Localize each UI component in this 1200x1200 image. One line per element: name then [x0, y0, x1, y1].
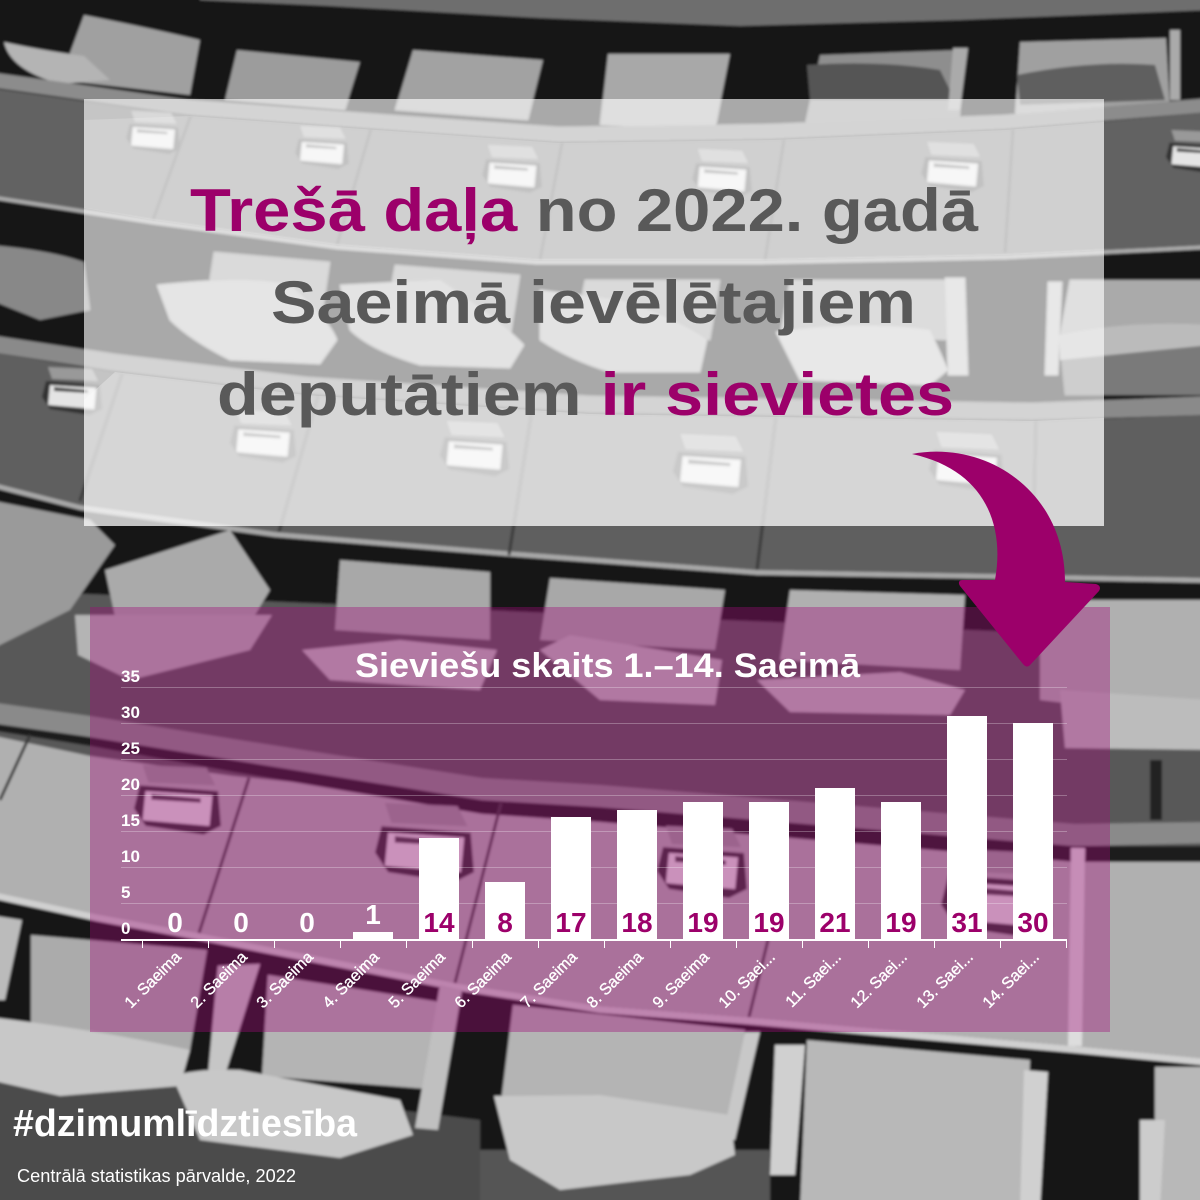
rail row 2 [0, 335, 1200, 420]
y axis labels: 0 [121, 919, 130, 938]
value labels: 0 [233, 907, 249, 938]
x axis labels: 12. Saei... [848, 949, 911, 1012]
value labels [167, 899, 1049, 938]
headline line 2: Saeimā ievēlētajiem [271, 269, 916, 336]
desk dividers [0, 115, 1036, 1017]
value labels: 17 [555, 907, 587, 938]
top desks row [200, 0, 1200, 26]
x axis labels [122, 949, 1043, 1012]
x axis labels: 6. Saeima [452, 949, 515, 1012]
panel: chart backdrop [90, 607, 1110, 1032]
x axis labels: 14. Saei... [980, 949, 1043, 1012]
arrow: curved pointing to chart [912, 452, 1100, 666]
value labels: 21 [819, 907, 851, 938]
value labels: 0 [167, 907, 183, 938]
value labels: 30 [1017, 907, 1049, 938]
y axis labels: 35 [121, 667, 140, 686]
desks row 2 [0, 88, 1200, 260]
y axis labels: 20 [121, 775, 140, 794]
x axis labels: 4. Saeima [320, 949, 383, 1012]
value labels: 18 [621, 907, 653, 938]
rail row 3 shadow [0, 722, 1200, 862]
y axis labels: 10 [121, 847, 140, 866]
headline line 3: deputātiem ir sievietes [217, 361, 954, 428]
y axis labels: 25 [121, 739, 140, 758]
bar chart [121, 647, 1067, 1012]
panel: headline backdrop [84, 99, 1104, 526]
x axis labels: 9. Saeima [650, 949, 713, 1012]
value labels: 14 [423, 907, 455, 938]
x axis labels: 8. Saeima [584, 949, 647, 1012]
y axis labels: 15 [121, 811, 140, 830]
x axis labels: 5. Saeima [386, 949, 449, 1012]
x axis labels: 1. Saeima [122, 949, 185, 1012]
rail row 1 [0, 72, 1200, 142]
x axis with ticks [121, 939, 1067, 948]
bars [353, 716, 1053, 940]
rail row 3 [0, 702, 1200, 846]
value labels: 19 [687, 907, 719, 938]
y axis labels: 5 [121, 883, 130, 902]
hashtag: #dzimumlīdztiesība [13, 1103, 358, 1145]
x axis labels: 7. Saeima [518, 949, 581, 1012]
desks row 4 [0, 735, 1200, 1059]
floor bands [0, 590, 1200, 860]
value labels: 0 [299, 907, 315, 938]
y axis labels: 30 [121, 703, 140, 722]
x axis labels: 3. Saeima [254, 949, 317, 1012]
value labels: 8 [497, 907, 513, 938]
desk consoles [126, 111, 180, 154]
y axis labels [121, 667, 140, 938]
x axis labels: 10. Saei... [716, 949, 779, 1012]
grid lines [121, 688, 1067, 904]
chart title: Sieviešu skaits 1.–14. Saeimā [355, 647, 861, 685]
x axis labels: 11. Saei... [783, 949, 845, 1011]
value labels: 1 [365, 899, 381, 930]
chairs row 1 [60, 15, 200, 95]
chairs row 4 [31, 935, 207, 1050]
headline line 1: Trešā daļa no 2022. gadā [190, 177, 979, 244]
source line: Centrālā statistikas pārvalde, 2022 [17, 1166, 296, 1186]
chairs row 2 [0, 245, 90, 320]
value labels: 31 [951, 907, 983, 938]
desks row 3 [0, 352, 1200, 578]
title: headline [190, 177, 979, 428]
x axis labels: 2. Saeima [188, 949, 251, 1012]
value labels: 19 [753, 907, 785, 938]
value labels: 19 [885, 907, 917, 938]
x axis labels: 13. Saei... [914, 949, 977, 1012]
chairs row 3 [0, 500, 115, 650]
